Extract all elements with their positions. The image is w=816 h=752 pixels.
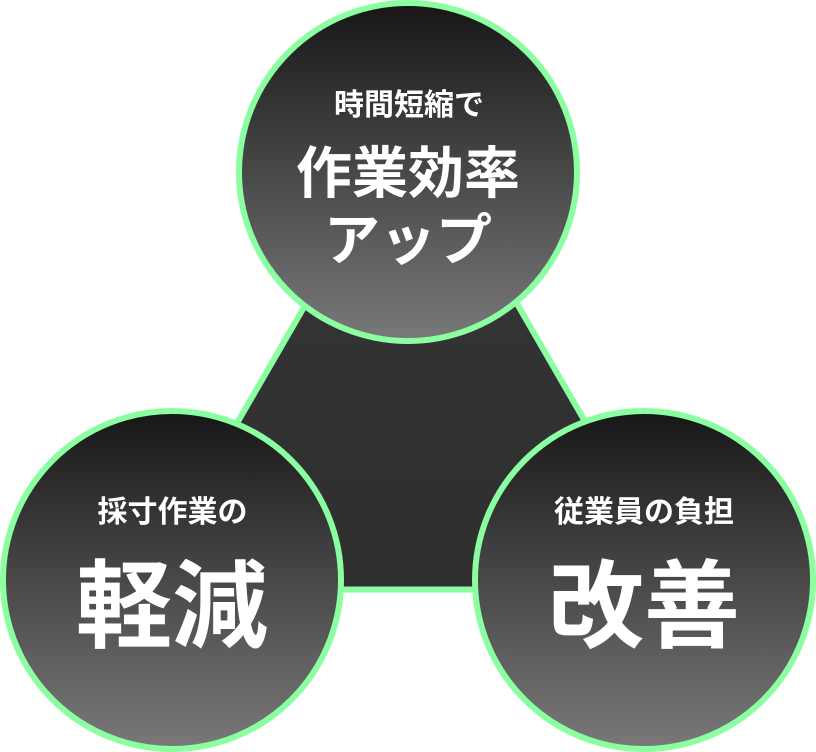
circle: right benefit <box>475 411 813 749</box>
circle: top benefit <box>239 3 577 341</box>
heading: left: 軽減 <box>76 554 268 661</box>
subheading: top: 時間短縮で <box>334 89 484 122</box>
subheading: right: 従業員の負担 <box>554 496 734 529</box>
central triangle <box>141 121 682 590</box>
subheading: left: 採寸作業の <box>98 496 248 529</box>
heading line 2: top: アップ <box>324 209 492 272</box>
heading: right: 改善 <box>548 554 740 661</box>
heading: top: 作業効率 <box>296 142 520 205</box>
circle: left benefit <box>3 411 341 749</box>
